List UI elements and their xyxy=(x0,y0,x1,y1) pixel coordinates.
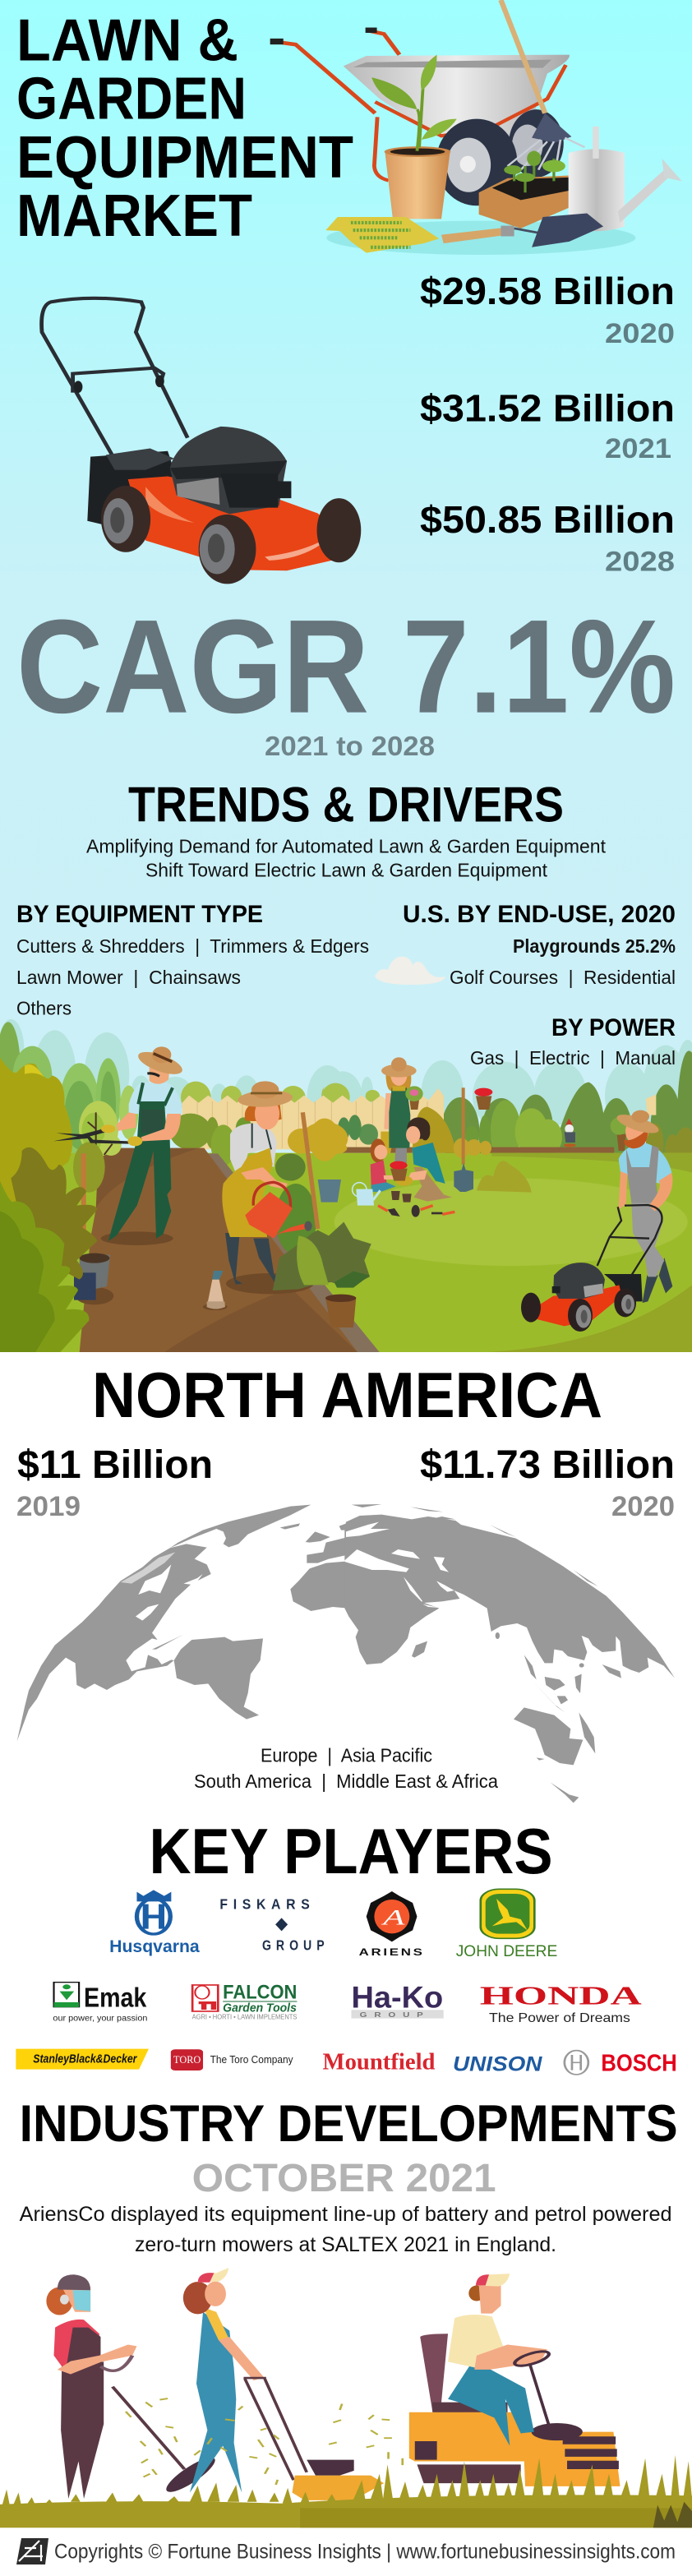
logo: Toro xyxy=(171,2049,293,2070)
panel: by power: BY POWER xyxy=(551,1014,676,1041)
text: trends list: Shift Toward Electric Lawn & Garden Equipment xyxy=(145,859,548,880)
text: trends list: Amplifying Demand for Automated Lawn & Garden Equipment xyxy=(86,836,607,857)
stat: 2020 market size xyxy=(420,270,675,349)
map: world globe xyxy=(17,1504,675,1803)
panel: US by end-use: Playgrounds 25.2% xyxy=(513,935,676,957)
person: man on riding mower xyxy=(409,2274,620,2486)
title: GARDEN xyxy=(16,67,247,132)
stat: 2028 market size xyxy=(420,498,675,578)
heading: key players: KEY PLAYERS xyxy=(150,1815,552,1887)
stat: 2019: 2019 xyxy=(16,1491,81,1522)
logo: Ha-Ko Group xyxy=(351,1981,444,2019)
logo: Ariens: A xyxy=(381,1905,405,1930)
illustration: workers cutting grass xyxy=(0,2268,692,2528)
logo: John Deere: JOHN DEERE xyxy=(456,1943,557,1960)
stat: 2028 market size: 2028 xyxy=(605,547,675,578)
logo: Falcon Garden Tools: FALCON xyxy=(223,1981,297,2003)
scene backdrop: hills, fence and lawn xyxy=(0,1019,692,1352)
text: development description: AriensCo displayed its equipment line-up of battery and petrol powered xyxy=(20,2203,672,2226)
date: October 2021: OCTOBER 2021 xyxy=(192,2157,496,2200)
title xyxy=(16,8,353,249)
logo: Fiskars Group: FISKARS xyxy=(219,1896,315,1912)
panel: by equipment type xyxy=(16,901,369,1019)
people: family planting xyxy=(353,1057,454,1217)
plants and pot beside the path xyxy=(273,1222,371,1327)
logo: John Deere xyxy=(456,1889,557,1960)
logo: Honda xyxy=(480,1982,642,2025)
panel: by power: Gas | Electric | Manual xyxy=(470,1047,676,1069)
logo: Mountfield: Mountfield xyxy=(323,2049,435,2075)
panel: by equipment type: Cutters & Shredders | Trimmers & Edgers xyxy=(16,935,369,957)
logo: Stanley Black and Decker: StanleyBlack&Decker xyxy=(33,2052,137,2066)
stat: 2020 xyxy=(420,1443,675,1522)
title: MARKET xyxy=(16,183,252,249)
logo: Honda: The Power of Dreams xyxy=(489,2010,630,2025)
logo: Unison: UNISON xyxy=(453,2053,542,2075)
text: other regions: Europe | Asia Pacific xyxy=(261,1745,432,1766)
person: woman with trimmer xyxy=(46,2274,221,2499)
panel: by equipment type: Others xyxy=(16,998,72,1019)
logo: Husqvarna xyxy=(109,1890,200,1956)
logos: key players xyxy=(16,1889,677,2076)
logo: Stanley Black and Decker xyxy=(16,2049,149,2070)
person: man pushing mower xyxy=(615,1110,672,1303)
panel: by equipment type: BY EQUIPMENT TYPE xyxy=(16,901,263,928)
person: woman with watering can xyxy=(207,1081,341,1309)
stat: 2021 market size: 2021 xyxy=(605,433,671,464)
logo: Ha-Ko Group: Ha-Ko xyxy=(351,1981,443,2015)
title: EQUIPMENT xyxy=(16,125,353,191)
logo: Falcon Garden Tools xyxy=(192,1981,297,2021)
panel: by power xyxy=(470,1014,676,1069)
small red mower xyxy=(521,1205,662,1332)
stat: 2021 market size xyxy=(420,386,675,464)
logo: Emak xyxy=(53,1983,147,2023)
logo: Emak: Emak xyxy=(84,1983,146,2013)
panel: by equipment type: Lawn Mower | Chainsaws xyxy=(16,967,241,988)
stat: 2020 market size: 2020 xyxy=(605,318,675,349)
illustration: garden scene xyxy=(0,1019,692,1352)
CAGR period: 2021 to 2028 xyxy=(265,731,435,761)
text: development description: zero-turn mowers at SALTEX 2021 in England. xyxy=(135,2233,556,2256)
logo: Toro: TORO xyxy=(173,2054,201,2066)
logo: Ariens: ARIENS xyxy=(359,1946,425,1958)
logo: Fiskars Group xyxy=(219,1896,330,1953)
icon: cloud xyxy=(375,957,445,985)
stat: 2019: $11 Billion xyxy=(17,1443,213,1487)
grass clippings xyxy=(126,2398,403,2485)
illustration: wheelbarrow and garden tools xyxy=(270,0,682,255)
text: trends list xyxy=(86,836,607,880)
stat: 2020 market size: $29.58 Billion xyxy=(420,270,675,312)
person: woman with push mower xyxy=(183,2268,384,2500)
title: LAWN & xyxy=(16,8,238,74)
stat: 2021 market size: $31.52 Billion xyxy=(420,386,675,429)
scene: garden path and hedge xyxy=(0,1058,380,1352)
logo: Bosch xyxy=(565,2051,677,2076)
text: development description xyxy=(20,2203,672,2256)
text: other regions: South America | Middle East & Africa xyxy=(194,1770,498,1792)
text: other regions xyxy=(194,1745,498,1792)
panel: US by end-use xyxy=(403,901,676,988)
stat: 2020: 2020 xyxy=(611,1491,675,1522)
logo: Honda: HONDA xyxy=(480,1982,642,2010)
panel: US by end-use: U.S. BY END-USE, 2020 xyxy=(403,901,676,928)
stat: 2019 xyxy=(16,1443,213,1522)
logo: Falcon Garden Tools: AGRI • HORTI • LAWN IMPLEMENTS xyxy=(192,2014,297,2021)
logo: Fiskars Group: GROUP xyxy=(262,1937,330,1953)
logo: Ha-Ko Group: GROUP xyxy=(360,2011,431,2019)
logo: Husqvarna: Husqvarna xyxy=(109,1937,200,1956)
heading: north america: NORTH AMERICA xyxy=(92,1359,602,1431)
stat: 2020: $11.73 Billion xyxy=(420,1443,675,1487)
footer: logo mark xyxy=(16,2538,48,2564)
garden props: spade, basket, gnome xyxy=(454,1087,628,1192)
logo: Emak: our power, your passion xyxy=(53,2013,147,2023)
illustration: red lawn mower xyxy=(42,298,361,584)
panel: US by end-use: Golf Courses | Residential xyxy=(450,967,676,988)
person: man with shears xyxy=(53,1046,185,1241)
heading: trends and drivers: TRENDS & DRIVERS xyxy=(128,777,564,832)
logo: Ariens xyxy=(359,1891,425,1958)
logo: Toro: The Toro Company xyxy=(210,2054,293,2066)
grass strip xyxy=(0,2455,692,2528)
stat: 2028 market size: $50.85 Billion xyxy=(420,498,675,541)
logo: Falcon Garden Tools: Garden Tools xyxy=(223,2001,297,2015)
